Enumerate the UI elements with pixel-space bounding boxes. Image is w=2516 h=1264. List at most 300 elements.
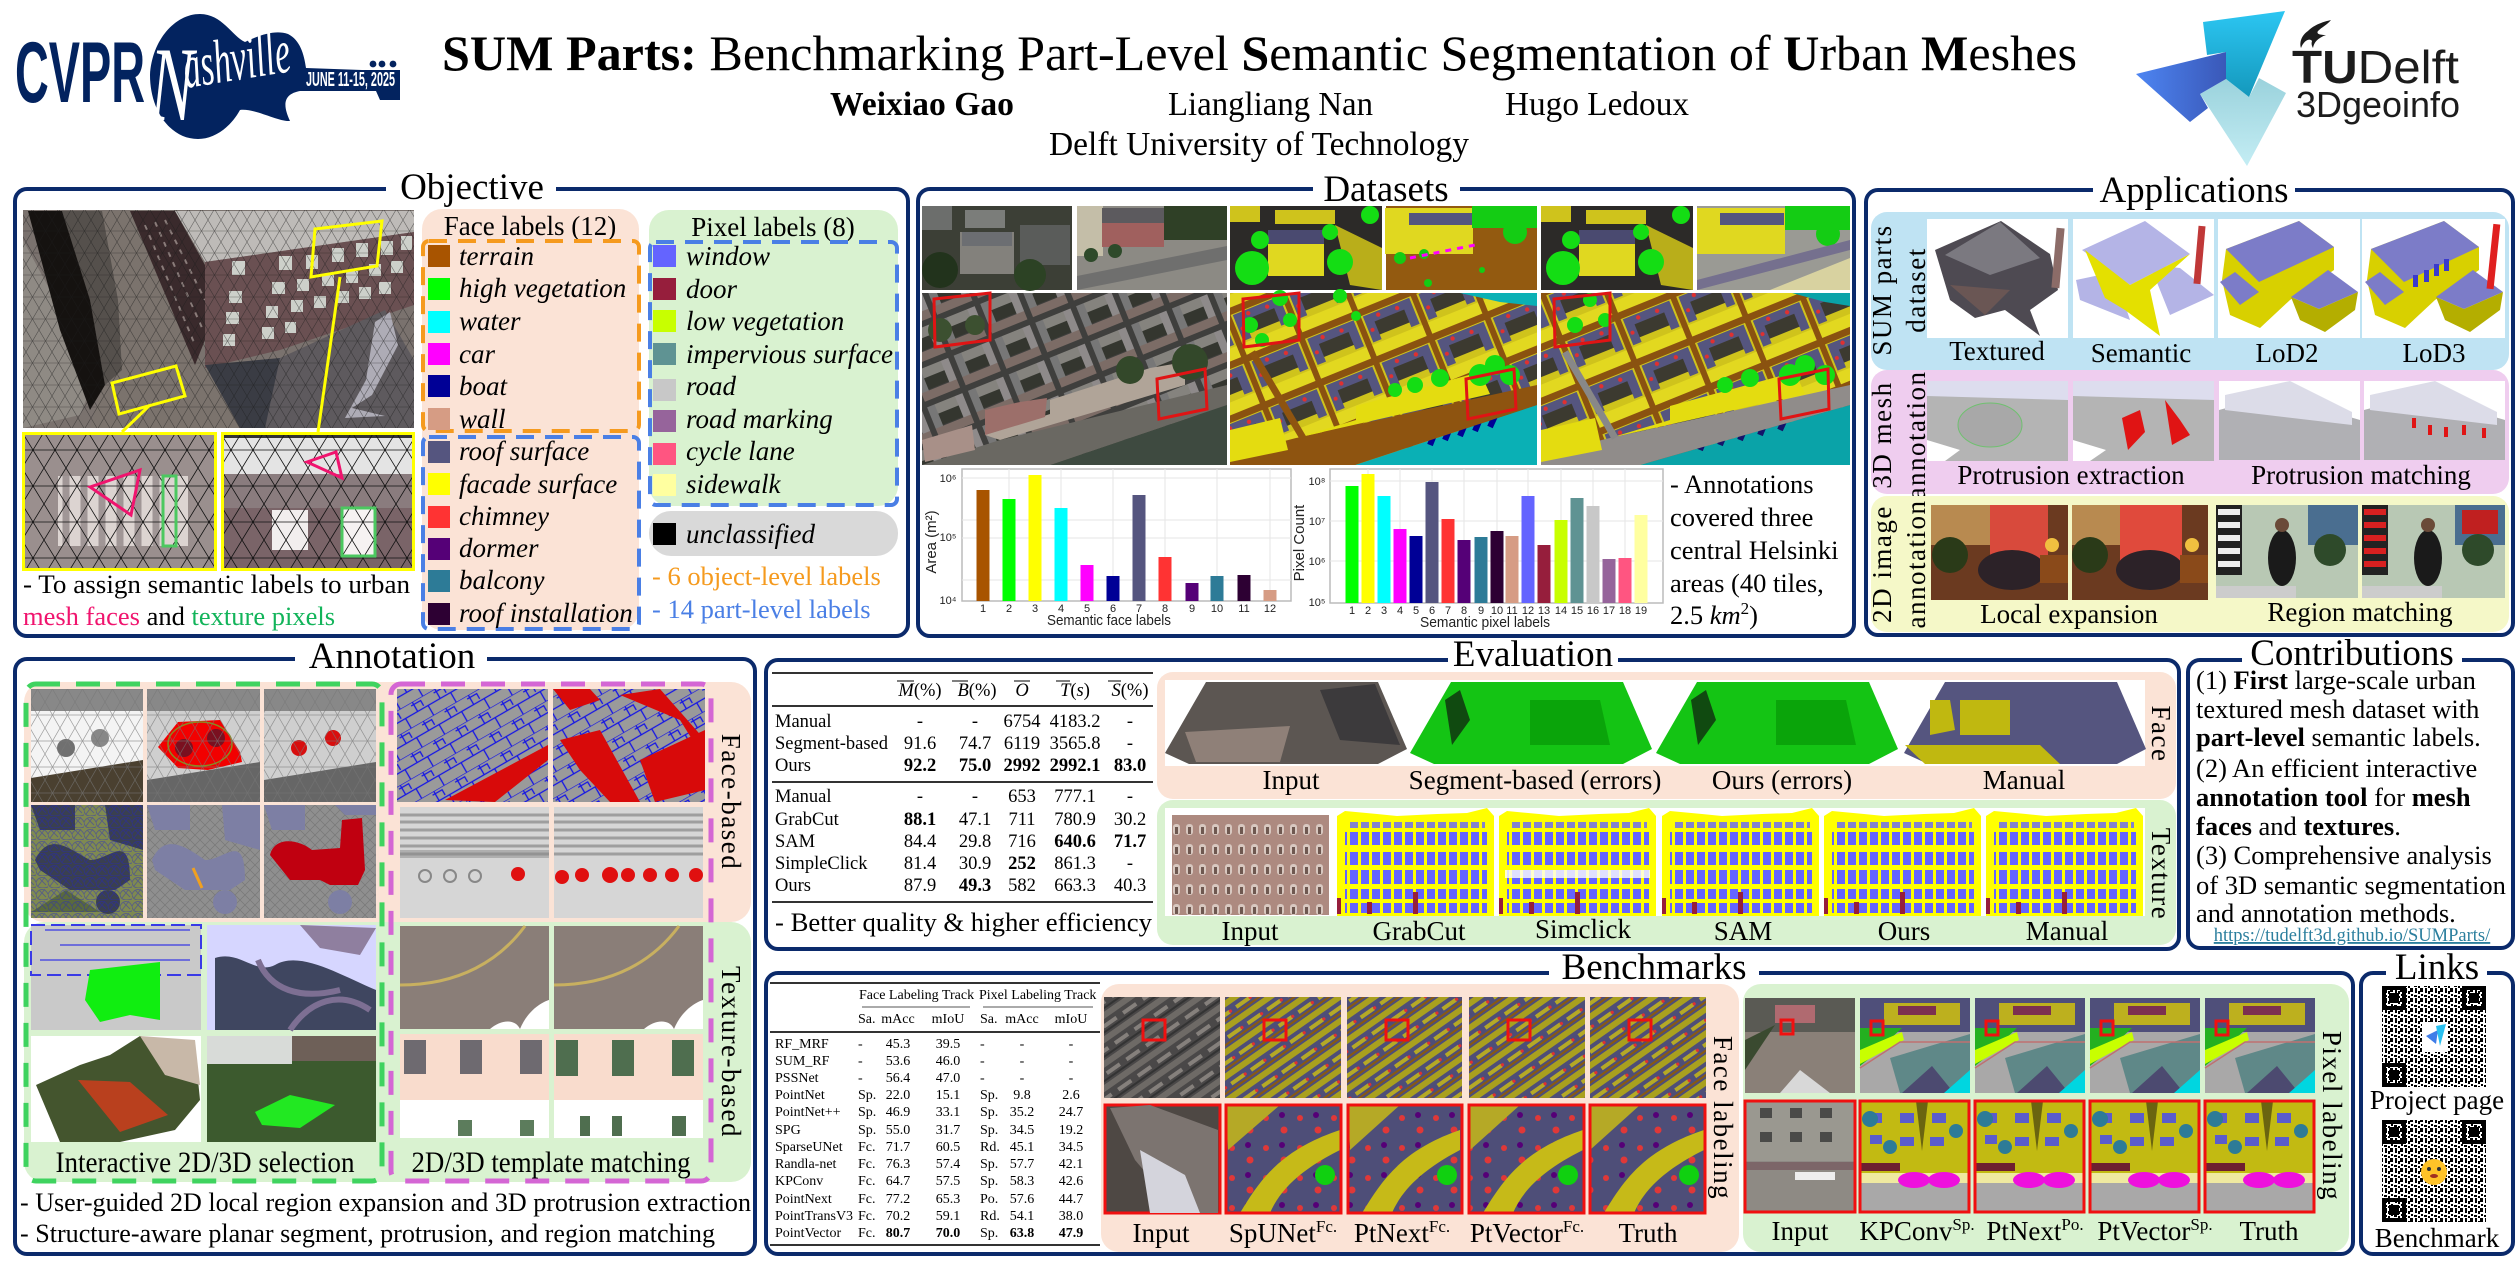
bar chart: pixel count per label: 4: [1397, 605, 1403, 617]
band: texture-based: Texture-based: [716, 966, 746, 1138]
table: annotation results: 87.9: [904, 876, 936, 896]
authors and affiliation: Delft University of Technology: [1049, 126, 1469, 163]
band: SUM parts dataset: LoD3: [2402, 338, 2466, 368]
table: annotation results: 30.9: [959, 854, 991, 874]
table: benchmark results: PointTransV3: [775, 1209, 853, 1224]
band: SUM parts dataset: dataset: [1901, 247, 1931, 333]
table: benchmark results: SparseUNet: [775, 1140, 843, 1155]
table: benchmark results: SUM_RF: [775, 1054, 830, 1069]
bar chart: pixel count per label: 6: [1429, 605, 1435, 617]
legend: pixel labels: impervious surface: [686, 339, 893, 369]
table: benchmark results: 33.1: [936, 1105, 960, 1120]
QR code: benchmark: [2382, 1120, 2486, 1222]
table: benchmark results: Rd.: [980, 1209, 1000, 1224]
band: pixel labeling: Sp.: [1952, 1215, 1975, 1234]
legend: unclassified: unclassified: [686, 519, 815, 549]
table: benchmark results: -: [1020, 1071, 1025, 1086]
band: pixel labeling: Pixel labeling: [2317, 1031, 2347, 1201]
logo: CVPR Nashville guitar: [15, 14, 400, 143]
table: benchmark results: 9.8: [1013, 1088, 1031, 1103]
contributions list: faces and textures.: [2196, 811, 2401, 841]
legend summary: - 14 part-level labels: [652, 594, 871, 624]
table: annotation results: 47.1: [959, 810, 991, 830]
band: face labeling: Fc.: [1429, 1217, 1450, 1236]
table: benchmark results: mIoU: [1055, 1012, 1087, 1027]
band: face labeling: Face labeling: [1708, 1036, 1738, 1200]
table: benchmark results: Pixel Labeling Track: [979, 988, 1096, 1003]
contributions list: of 3D semantic segmentation: [2196, 870, 2506, 900]
legend summary: - 6 object-level labels: [652, 561, 881, 591]
table: benchmark results: -: [980, 1037, 985, 1052]
legend: face labels: wall: [459, 404, 506, 434]
table: benchmark results: 22.0: [886, 1088, 910, 1103]
table: benchmark results: SPG: [775, 1123, 801, 1138]
table: benchmark results: PointNet: [775, 1088, 825, 1103]
table: benchmark results: Randla-net: [775, 1157, 837, 1172]
bar chart: pixel count per label: 7: [1445, 605, 1451, 617]
band: face evaluation: Manual: [1983, 765, 2065, 795]
table: annotation results: Manual: [775, 787, 832, 807]
heading: benchmarks: Benchmarks: [1562, 947, 1746, 988]
table: benchmark results: 46.9: [886, 1105, 910, 1120]
panel: annotation: [15, 636, 755, 1254]
bar chart: pixel count per label: [1291, 469, 1663, 631]
band: pixel labeling: [1743, 984, 2349, 1252]
table: annotation results: 780.9: [1054, 810, 1096, 830]
table: benchmark results: 57.7: [1010, 1157, 1034, 1172]
logo: CVPR Nashville guitar: ashville: [178, 18, 295, 102]
band: face labeling: Truth: [1618, 1218, 1678, 1248]
authors and affiliation: [830, 86, 1689, 163]
band: SUM parts dataset: [1867, 212, 2509, 370]
dashed box: interactive selection: Interactive 2D/3D selection: [56, 1146, 354, 1179]
band: 3D mesh annotation: annotation: [1901, 371, 1931, 499]
panel: benchmarks: [766, 947, 2353, 1254]
table: benchmark results: 15.1: [936, 1088, 960, 1103]
dataset overview: textured: [922, 293, 1227, 465]
band: face labeling: [1101, 984, 1739, 1252]
table: annotation results: 29.8: [959, 832, 991, 852]
band: 2D image annotation: Local expansion: [1980, 599, 2158, 629]
legend: face labels: facade surface: [459, 469, 617, 499]
table: benchmark results: 57.6: [1010, 1192, 1034, 1207]
authors and affiliation: Weixiao Gao: [830, 86, 1014, 123]
table: benchmark results: -: [1069, 1054, 1074, 1069]
legend: pixel labels: low vegetation: [686, 306, 844, 336]
legend: face labels: roof surface: [459, 436, 589, 466]
table: benchmark results: 71.7: [886, 1140, 910, 1155]
legend: face labels: terrain: [459, 241, 534, 271]
table: benchmark results: 55.0: [886, 1123, 910, 1138]
bar chart: pixel count per label: 2: [1365, 605, 1371, 617]
bar chart: area per face label: 11: [1238, 603, 1250, 615]
dataset caption: covered three: [1670, 502, 1813, 532]
table: benchmark results: 34.5: [1010, 1123, 1034, 1138]
table: annotation results: 6754: [1004, 712, 1040, 732]
bar chart: pixel count per label: 10⁸: [1309, 476, 1325, 488]
band: texture evaluation: Simclick: [1535, 914, 1631, 944]
band: pixel labeling: Truth: [2239, 1216, 2299, 1246]
table: benchmark results: 38.0: [1059, 1209, 1083, 1224]
band: texture evaluation: [1157, 800, 2176, 946]
table: benchmark results: Fc.: [858, 1174, 876, 1189]
band: texture evaluation: Texture: [2146, 828, 2176, 920]
authors and affiliation: Liangliang Nan: [1168, 86, 1373, 123]
heading: annotation: Annotation: [309, 636, 475, 677]
legend: face labels: dormer: [459, 533, 539, 563]
benchmark label: Benchmark: [2375, 1223, 2500, 1253]
table: annotation results: -: [972, 712, 978, 732]
project link: https://tudelft3d.github.io/SUMParts/: [2214, 926, 2491, 946]
bar chart: pixel count per label: 10: [1491, 605, 1503, 617]
table: benchmark results: 56.4: [886, 1071, 910, 1086]
table: benchmark results: Sp.: [858, 1123, 876, 1138]
dashed box: template matching: 2D/3D template matching: [412, 1146, 690, 1179]
table: annotation results: 92.2: [904, 756, 936, 776]
table: benchmark results: -: [980, 1071, 985, 1086]
bar chart: pixel count per label: 17: [1603, 605, 1615, 617]
band: texture evaluation: SAM: [1714, 916, 1772, 946]
dataset caption: central Helsinki: [1670, 535, 1839, 565]
panel: objective: [15, 167, 908, 636]
template matching examples: [397, 689, 705, 1138]
table: annotation results: -: [1127, 734, 1133, 754]
dataset caption: 2.5 km: [1670, 600, 1741, 630]
table: annotation results: 88.1: [904, 810, 936, 830]
bar chart: pixel count per label: 12: [1522, 605, 1534, 617]
dataset caption: - Annotations: [1670, 469, 1814, 499]
table: benchmark results: Sp.: [980, 1174, 998, 1189]
bar chart: pixel count per label: 18: [1619, 605, 1631, 617]
bar chart: area per face label: 8: [1162, 603, 1168, 615]
bar chart: area per face label: 5: [1084, 603, 1090, 615]
table: benchmark results: -: [858, 1054, 863, 1069]
band: 2D image annotation: annotation: [1901, 500, 1931, 628]
table: benchmark results: 59.1: [936, 1209, 960, 1224]
heading: links: Links: [2395, 947, 2479, 988]
band: face evaluation: Ours (errors): [1712, 765, 1852, 795]
table: annotation results: 83.0: [1114, 756, 1146, 776]
table: benchmark results: mIoU: [932, 1012, 964, 1027]
legend: pixel labels: [649, 210, 898, 506]
bar chart: area per face label: 9: [1189, 603, 1195, 615]
bar chart: area per face label: 4: [1058, 603, 1064, 615]
authors and affiliation: Hugo Ledoux: [1505, 86, 1689, 123]
bar chart: pixel count per label: 13: [1538, 605, 1550, 617]
table: annotation results: B(%): [957, 681, 997, 701]
band: face evaluation: Face: [2146, 706, 2176, 762]
band: face labeling: Fc.: [1563, 1217, 1584, 1236]
legend: face labels: water: [459, 306, 521, 336]
band: texture evaluation: Manual: [2026, 916, 2108, 946]
bar chart: pixel count per label: 8: [1461, 605, 1467, 617]
panel: evaluation: [766, 634, 2179, 949]
table: benchmark results: PointVector: [775, 1226, 841, 1241]
table: benchmark results: -: [1020, 1037, 1025, 1052]
table: annotation results: Ours: [775, 756, 811, 776]
title: SUM Parts: Benchmarking Part-Level Semantic Segmentation of Urban Meshes: [442, 25, 2077, 81]
table: benchmark results: Sa.: [858, 1012, 876, 1027]
logo: CVPR Nashville guitar: CVPR: [15, 25, 145, 121]
bar chart: pixel count per label: 15: [1571, 605, 1583, 617]
table: annotation results: SimpleClick: [775, 854, 868, 874]
table: benchmark results: Rd.: [980, 1140, 1000, 1155]
table: benchmark results: Sa.: [980, 1012, 998, 1027]
heading: applications: Applications: [2099, 170, 2289, 211]
table: benchmark results: Po.: [980, 1192, 998, 1207]
bar chart: pixel count per label: 10⁷: [1309, 516, 1325, 528]
table: benchmark results: 65.3: [936, 1192, 960, 1207]
table: annotation results: 2992: [1004, 756, 1040, 776]
table: benchmark results: RF_MRF: [775, 1037, 829, 1052]
table: benchmark results: 57.4: [936, 1157, 960, 1172]
legend: face labels: roof installation: [459, 598, 633, 628]
table: benchmark results: -: [1069, 1071, 1074, 1086]
inset: window detail: [221, 432, 415, 571]
dataset overview: semantic face labels: [1230, 289, 1537, 465]
table: annotation results: 84.4: [904, 832, 936, 852]
table: benchmark results: Face Labeling Track: [859, 988, 974, 1003]
table: benchmark results: 53.6: [886, 1054, 910, 1069]
bar chart: area per face label: 6: [1110, 603, 1116, 615]
table: annotation results: 3565.8: [1050, 734, 1100, 754]
table: benchmark results: 60.5: [936, 1140, 960, 1155]
dataset caption: ): [1749, 600, 1758, 630]
bar chart: pixel count per label: 5: [1413, 605, 1419, 617]
band: 2D image annotation: Region matching: [2267, 597, 2453, 627]
table: benchmark results: 70.2: [886, 1209, 910, 1224]
bar chart: area per face label: 7: [1136, 603, 1142, 615]
heading: datasets: Datasets: [1323, 169, 1449, 210]
annotation caption: [20, 1187, 751, 1248]
table: benchmark results: 54.1: [1010, 1209, 1034, 1224]
band: pixel labeling: Sp.: [2190, 1215, 2213, 1234]
table: annotation results: 75.0: [959, 756, 991, 776]
table: annotation results: 30.2: [1114, 810, 1146, 830]
table: annotation results: 716: [1008, 832, 1036, 852]
table: benchmark results: Fc.: [858, 1157, 876, 1172]
table: benchmark results: Sp.: [858, 1088, 876, 1103]
dataset thumbnails top row: [922, 206, 1850, 291]
inset: striped facade detail: [22, 432, 217, 571]
table: annotation results: M(%): [897, 681, 942, 701]
table: benchmark results: 70.0: [936, 1226, 960, 1241]
table: benchmark results: PointNet++: [775, 1105, 841, 1120]
table: annotation results: 2992.1: [1050, 756, 1100, 776]
band: SUM parts dataset: SUM parts: [1867, 224, 1897, 356]
table: benchmark results: Sp.: [980, 1123, 998, 1138]
table: benchmark results: 46.0: [936, 1054, 960, 1069]
dataset caption: 2: [1741, 599, 1749, 618]
contributions list: annotation tool for mesh: [2196, 782, 2471, 812]
bar chart: area per face label: 10⁵: [940, 532, 956, 544]
band: SUM parts dataset: Semantic: [2091, 338, 2191, 368]
legend summary: [652, 561, 881, 624]
table: benchmark results: KPConv: [775, 1174, 823, 1189]
bar chart: pixel count per label: 19: [1635, 605, 1647, 617]
band: pixel labeling: Input: [1772, 1216, 1829, 1246]
contributions list: (3) Comprehensive analysis: [2196, 840, 2492, 870]
legend: pixel labels: cycle lane: [686, 436, 795, 466]
bar chart: pixel count per label: 16: [1587, 605, 1599, 617]
bar chart: area per face label: Semantic face labels: [1047, 612, 1171, 629]
table: benchmark results: 44.7: [1059, 1192, 1083, 1207]
table: benchmark results: 42.1: [1059, 1157, 1083, 1172]
legend: pixel labels: road marking: [686, 404, 833, 434]
objective caption: [23, 569, 410, 631]
table: annotation results: 640.6: [1054, 832, 1096, 852]
table: annotation results: S(%): [1112, 681, 1148, 701]
table: benchmark results: 80.7: [886, 1226, 910, 1241]
table: benchmark results: -: [1020, 1054, 1025, 1069]
table: benchmark results: PSSNet: [775, 1071, 819, 1086]
table: benchmark results: 64.7: [886, 1174, 910, 1189]
table: benchmark results: 24.7: [1059, 1105, 1083, 1120]
table: benchmark results: Sp.: [980, 1226, 998, 1241]
table: annotation results: -: [1127, 712, 1133, 732]
objective caption: mesh faces and texture pixels: [23, 601, 335, 631]
table: annotation results: -: [1127, 854, 1133, 874]
bar chart: area per face label: Area (m²): [923, 510, 940, 574]
logo: CVPR Nashville guitar: JUNE 11-15, 2025: [306, 69, 395, 91]
table: annotation results: -: [917, 712, 923, 732]
table: benchmark results: mAcc: [881, 1012, 915, 1027]
table: annotation results: 6119: [1004, 734, 1040, 754]
legend: face labels: car: [459, 339, 495, 369]
band: face evaluation: [1157, 672, 2176, 799]
contributions list: (2) An efficient interactive: [2196, 753, 2477, 783]
table: benchmark results: mAcc: [1005, 1012, 1039, 1027]
bar chart: area per face label: [923, 469, 1291, 629]
table: benchmark results: PointNext: [775, 1192, 832, 1207]
bar chart: pixel count per label: Semantic pixel labels: [1420, 614, 1550, 631]
table: annotation results: -: [917, 787, 923, 807]
band: texture evaluation: GrabCut: [1373, 916, 1466, 946]
legend: pixel labels: road: [686, 371, 737, 401]
bar chart: pixel count per label: 10⁶: [1309, 556, 1325, 568]
table: annotation results: GrabCut: [775, 810, 840, 830]
bar chart: area per face label: 3: [1032, 603, 1038, 615]
dataset caption: [1670, 469, 1839, 630]
band: face evaluation: Input: [1262, 765, 1320, 795]
bar chart: area per face label: 1: [980, 603, 986, 615]
heading: contributions: Contributions: [2250, 633, 2454, 674]
band: face-based: Face-based: [716, 734, 746, 870]
table: annotation results: 81.4: [904, 854, 936, 874]
band: 3D mesh annotation: [1867, 370, 2509, 499]
table: benchmark results: -: [980, 1054, 985, 1069]
table: benchmark results: 35.2: [1010, 1105, 1034, 1120]
bar chart: area per face label: 12: [1264, 603, 1276, 615]
table: annotation results: O: [1015, 681, 1029, 701]
logo: CVPR Nashville guitar: N: [149, 26, 197, 143]
band: texture evaluation: Ours: [1878, 916, 1930, 946]
table: benchmark results: 2.6: [1062, 1088, 1080, 1103]
table: annotation results: Segment-based: [775, 734, 889, 754]
panel: datasets: [918, 169, 1854, 636]
table: annotation results: 861.3: [1054, 854, 1096, 874]
table: benchmark results: Fc.: [858, 1140, 876, 1155]
dashed box: template matching: [391, 684, 711, 1181]
panel: contributions: [2188, 633, 2513, 948]
table: benchmark results: -: [1069, 1037, 1074, 1052]
band: face-based: [24, 682, 751, 922]
table: benchmark results: Sp.: [858, 1105, 876, 1120]
bar chart: pixel count per label: 11: [1506, 605, 1518, 617]
bar chart: pixel count per label: 3: [1381, 605, 1387, 617]
table: annotation results: 252: [1008, 854, 1036, 874]
bar chart: area per face label: 10⁶: [940, 473, 956, 485]
legend: face labels: balcony: [459, 565, 544, 595]
band: face labeling: PtVector: [1470, 1218, 1563, 1248]
bar chart: area per face label: 10: [1211, 603, 1223, 615]
band: 3D mesh annotation: Protrusion extraction: [1957, 460, 2185, 490]
band: 3D mesh annotation: Protrusion matching: [2251, 460, 2471, 490]
table: annotation results: 40.3: [1114, 876, 1146, 896]
table: annotation results: -: [1127, 787, 1133, 807]
band: 3D mesh annotation: 3D mesh: [1867, 381, 1897, 489]
contributions list: part-level semantic labels.: [2196, 722, 2481, 752]
legend: unclassified: [649, 511, 898, 556]
dataset overview: semantic pixel labels: [1541, 293, 1850, 465]
logo: TU Delft 3Dgeoinfo: TUDelft: [2292, 41, 2459, 93]
legend: pixel labels: door: [686, 274, 738, 304]
logo: TU Delft 3Dgeoinfo: 3Dgeoinfo: [2296, 84, 2460, 125]
table: annotation results: 711: [1008, 810, 1036, 830]
band: face labeling: Fc.: [1316, 1217, 1337, 1236]
panel: applications: [1866, 170, 2513, 635]
dashed box: interactive selection: [26, 684, 382, 1181]
table: benchmark results: -: [858, 1071, 863, 1086]
legend: pixel labels: window: [686, 241, 770, 271]
legend: pixel labels: Pixel labels (8): [691, 212, 855, 242]
band: pixel labeling: Po.: [2061, 1215, 2084, 1234]
band: 2D image annotation: 2D image: [1867, 505, 1897, 623]
heading: objective: Objective: [400, 167, 544, 208]
table: annotation results: T(s): [1060, 681, 1090, 701]
contributions list: textured mesh dataset with: [2196, 694, 2479, 724]
table: benchmark results: Sp.: [980, 1105, 998, 1120]
bar chart: area per face label: 10⁴: [940, 595, 957, 607]
project page label: Project page: [2370, 1085, 2504, 1115]
panel: links: [2361, 947, 2513, 1254]
QR code: project page: [2382, 986, 2486, 1087]
logo: TU Delft 3Dgeoinfo: [2136, 11, 2460, 166]
table: benchmark results: Fc.: [858, 1192, 876, 1207]
table: benchmark results: 45.3: [886, 1037, 910, 1052]
dataset caption: areas (40 tiles,: [1670, 568, 1824, 598]
legend: face labels: boat: [459, 371, 508, 401]
table: annotation results: [772, 673, 1153, 902]
table: benchmark results: 77.2: [886, 1192, 910, 1207]
band: pixel labeling: PtNext: [1986, 1216, 2061, 1246]
band: face labeling: PtNext: [1354, 1218, 1429, 1248]
band: SUM parts dataset: LoD2: [2256, 338, 2318, 368]
evaluation caption: - Better quality & higher efficiency: [775, 907, 1153, 937]
table: benchmark results: 47.9: [1059, 1226, 1083, 1241]
table: annotation results: 49.3: [959, 876, 991, 896]
band: face labeling: Input: [1132, 1218, 1190, 1248]
table: benchmark results: -: [858, 1037, 863, 1052]
bar chart: pixel count per label: 10⁵: [1309, 597, 1325, 609]
legend: face labels: [422, 209, 639, 630]
table: benchmark results: 63.8: [1010, 1226, 1034, 1241]
table: annotation results: 4183.2: [1050, 712, 1100, 732]
table: annotation results: Ours: [775, 876, 811, 896]
table: annotation results: 663.3: [1054, 876, 1096, 896]
contributions list: [2196, 665, 2506, 928]
band: face evaluation: Segment-based (errors): [1409, 765, 1661, 795]
